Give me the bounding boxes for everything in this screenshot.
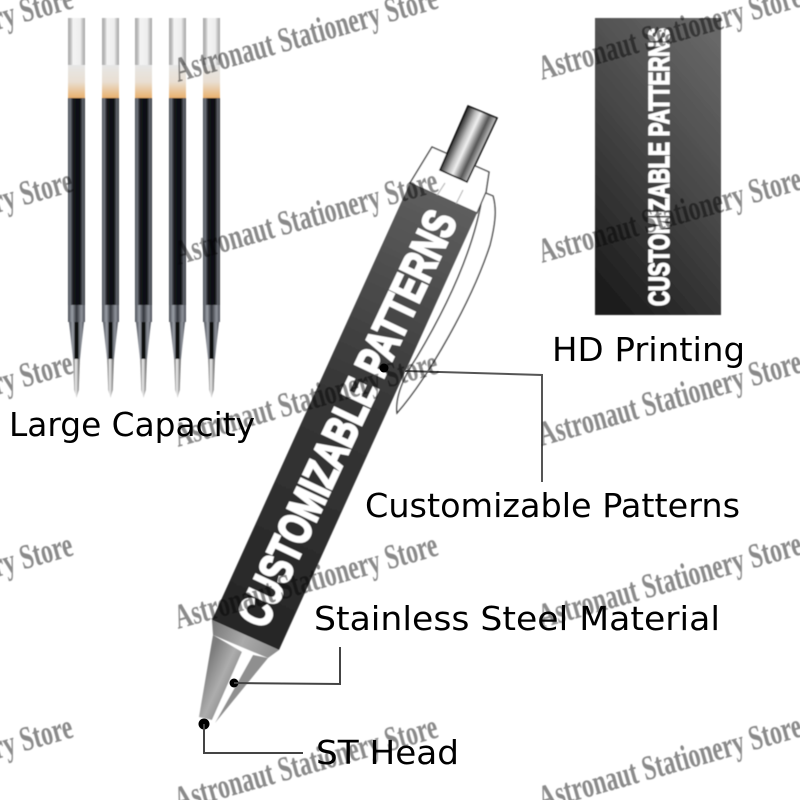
label: large capacity: Large Capacity [9, 405, 255, 444]
callout line: customizable patterns [380, 364, 542, 482]
refill 4 [169, 18, 186, 398]
panel: HD printed pattern strip [595, 18, 721, 315]
pen body text: CUSTOMIZABLE PATTERNS [227, 202, 467, 634]
panel: ink refills [68, 18, 220, 398]
pen top cap [410, 147, 489, 213]
refill 5 [203, 18, 220, 398]
refill 3 [135, 18, 152, 398]
watermark grid: Astronaut Stationery Store [170, 161, 442, 273]
pen nose collar [212, 620, 279, 658]
watermark grid: Astronaut Stationery Store [170, 525, 442, 637]
callout line: ST head [198, 718, 303, 753]
pen steel nose [199, 635, 268, 723]
pen clip [397, 192, 495, 413]
label: HD printing: HD Printing [552, 330, 745, 369]
illustration: pen [199, 106, 497, 723]
label: stainless steel material: Stainless Steel Material [314, 599, 720, 638]
refill 2 [102, 18, 119, 398]
label: ST head: ST Head [316, 733, 459, 772]
watermark grid: Astronaut Stationery Store [170, 343, 442, 455]
refill 1 [68, 18, 85, 398]
callout line: stainless steel [230, 647, 340, 688]
pen plunger [440, 106, 497, 182]
pen body [212, 183, 477, 650]
label: customizable patterns: Customizable Patterns [365, 486, 740, 525]
